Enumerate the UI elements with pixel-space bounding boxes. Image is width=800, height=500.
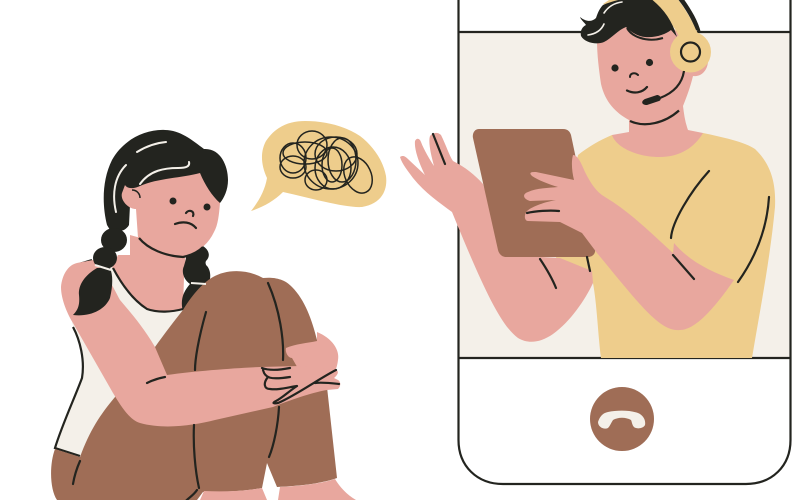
girl right foot: [278, 479, 356, 500]
far hand: [286, 332, 338, 372]
tangled scribble: [280, 131, 378, 198]
tank top: [55, 260, 184, 456]
hair back: [104, 130, 228, 231]
fingers lines: [262, 368, 339, 403]
hair highlights: [588, 2, 622, 35]
ear line: [132, 190, 140, 198]
neckline: [113, 268, 183, 312]
girl: [51, 130, 356, 500]
man shirt: [556, 133, 775, 358]
headset band: [603, 0, 699, 38]
hang up button: [590, 387, 654, 451]
speech bubble: [251, 121, 386, 211]
girl left foot: [200, 488, 267, 500]
headset ear cup and mic: [642, 32, 711, 105]
leg and arm crease lines: [73, 283, 283, 500]
man head and neck: [597, 25, 708, 157]
tablet: [473, 129, 595, 257]
man right arm and hand: [524, 155, 734, 330]
neck: [112, 235, 186, 312]
man: [400, 0, 775, 358]
man left arm and raised hand: [400, 133, 593, 342]
girl eyes: [170, 198, 210, 210]
girl arm: [61, 260, 340, 426]
pants: [51, 271, 337, 500]
right braid: [182, 246, 210, 312]
girl face: [122, 173, 220, 257]
bubble shape: [251, 121, 386, 211]
phone screen: [459, 32, 790, 358]
girl nose and mouth: [175, 211, 196, 228]
braid bands: [95, 265, 206, 284]
left braid: [73, 228, 127, 315]
man face: [611, 59, 653, 93]
arm and shirt crease lines: [433, 134, 769, 288]
phone: [458, 0, 790, 484]
tank top outline: [55, 260, 92, 456]
hair fringe line: [627, 28, 663, 40]
hair behind headset: [677, 0, 701, 33]
jaw line: [630, 110, 679, 124]
hair highlights: [114, 142, 189, 212]
phone outline: [458, 0, 790, 484]
man hair: [580, 0, 677, 43]
girl chin line: [139, 238, 203, 257]
